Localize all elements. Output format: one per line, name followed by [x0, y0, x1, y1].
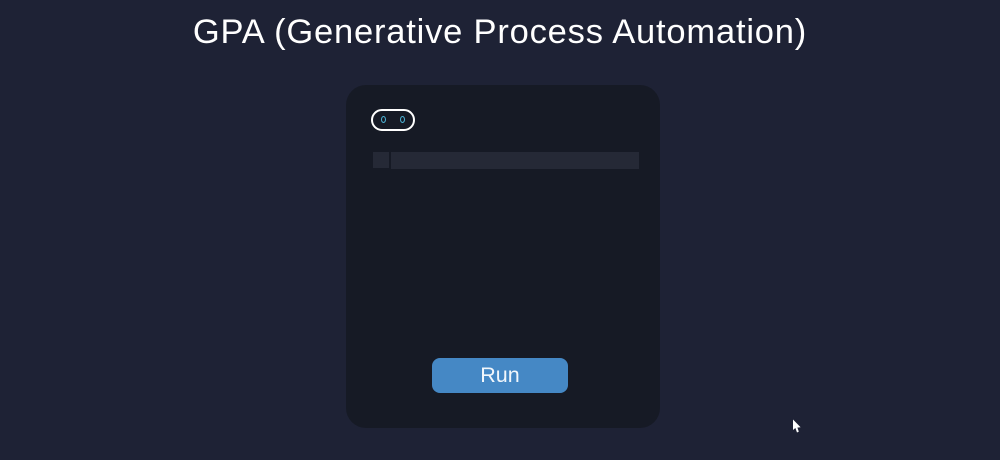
icon: mouse cursor — [793, 420, 800, 432]
progress block: small square — [373, 152, 389, 168]
panel: automation card — [346, 85, 660, 428]
progress block: long bar — [391, 152, 639, 169]
title: GPA (Generative Process Automation) — [193, 13, 807, 51]
icon: left eye — [381, 116, 386, 123]
icon: right eye — [400, 116, 405, 123]
icon: robot face — [371, 109, 415, 131]
button: Run — [432, 358, 568, 393]
button: Run: Run — [480, 363, 520, 387]
